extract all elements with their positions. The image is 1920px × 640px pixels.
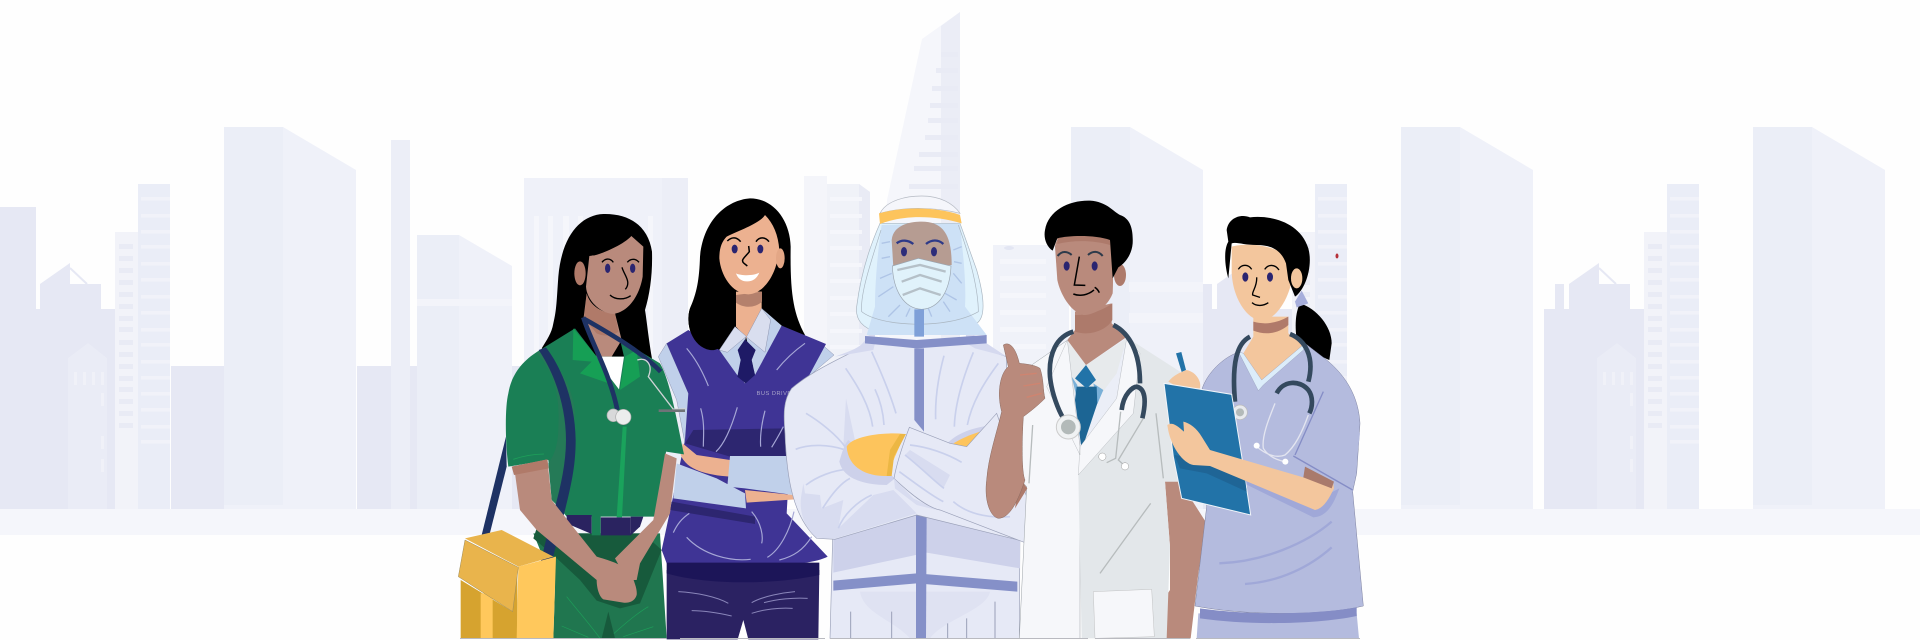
person: bus driver — [658, 198, 834, 639]
suit lower zipper — [916, 513, 927, 638]
doctor tie body — [1075, 387, 1097, 450]
suit upper body — [784, 343, 1027, 542]
nurse arm shadow — [1210, 467, 1339, 517]
bus driver hair back — [688, 198, 807, 367]
paramedic neck — [583, 293, 622, 357]
right tower one — [1401, 127, 1533, 509]
paramedic trouser lines — [562, 597, 653, 638]
hazmat face — [892, 222, 952, 267]
suit legs — [830, 513, 1020, 638]
nurse scrubs top — [1195, 343, 1363, 613]
centre-right city module — [1192, 184, 1347, 509]
doctor shirt — [1067, 338, 1127, 393]
crossed forearm — [894, 413, 1027, 543]
nurse pen — [1176, 352, 1186, 372]
nurse scrub folds — [1219, 522, 1332, 584]
paramedic placket — [617, 427, 627, 517]
nurse ponytail — [1296, 303, 1332, 360]
centre-right tower — [1071, 127, 1203, 509]
clipboard shadow — [1174, 455, 1247, 492]
doctor tie knot — [1075, 365, 1096, 388]
paramedic ear — [574, 261, 586, 285]
yellow headband — [879, 209, 962, 224]
bus driver crossed sleeve — [727, 456, 793, 495]
hood inner — [867, 223, 987, 335]
suit arm underside shade — [801, 483, 917, 539]
paramedic trouser shadow — [533, 528, 662, 608]
paramedic belt — [567, 515, 643, 535]
ground band — [0, 509, 1920, 535]
doctor forehead shade — [1057, 235, 1110, 245]
doctor face — [1055, 229, 1113, 315]
hazmat eyes and brows — [897, 240, 943, 256]
paramedic shirt side panel — [537, 350, 575, 513]
bus driver trousers — [667, 570, 819, 639]
doctor hair — [1045, 201, 1133, 278]
helmet dome — [880, 196, 960, 213]
nurse hair — [1225, 216, 1310, 297]
doctor pocket — [1093, 589, 1154, 638]
second left tower — [417, 235, 512, 509]
far left block — [0, 207, 36, 509]
person: doctor — [986, 201, 1207, 638]
paramedic shirt — [506, 328, 684, 517]
left city module — [15, 184, 170, 509]
bus driver features — [727, 238, 769, 281]
shield zipper section — [914, 309, 924, 337]
nurse ear — [1291, 268, 1302, 288]
bus driver hair front lock — [688, 280, 733, 350]
nurse sleeve fold — [1293, 392, 1353, 490]
nurse neck shadow — [1253, 317, 1288, 333]
nurse collar — [1238, 343, 1305, 391]
nurse scrubs trousers — [1197, 613, 1359, 638]
paramedic trouser seam — [602, 612, 615, 638]
clipboard — [1164, 383, 1251, 515]
forearm wrinkles — [899, 445, 1010, 517]
paramedic neck shadow — [584, 295, 618, 335]
nurse upper fingers — [1168, 370, 1200, 388]
paramedic arm left — [512, 459, 637, 603]
bus driver vest — [662, 326, 828, 568]
wide centre-left building — [524, 178, 688, 509]
paramedic features — [593, 240, 639, 299]
doctor stethoscope — [1050, 325, 1145, 470]
hazmat collar band — [865, 335, 987, 348]
doctor right arm — [1157, 482, 1207, 638]
person: hazmat suit worker — [784, 196, 1027, 638]
face shield outer — [856, 223, 983, 334]
person: nurse — [1164, 216, 1363, 638]
right tower two — [1753, 127, 1885, 509]
centre-right pale building — [993, 245, 1069, 509]
nurse stethoscope — [1233, 334, 1312, 465]
nurse forearm — [1167, 422, 1334, 510]
far glove — [946, 425, 1000, 460]
near glove surround — [839, 440, 895, 485]
paramedic face — [586, 236, 643, 314]
suit left shoulder shadow — [843, 398, 856, 447]
paramedic sleeve line — [513, 454, 544, 459]
far glove fill — [953, 428, 997, 457]
bus driver collar — [719, 308, 771, 352]
paramedic trousers — [533, 533, 667, 638]
surgical mask — [892, 258, 951, 309]
hood folds — [878, 242, 962, 317]
nurse sleeve edge — [1293, 393, 1360, 492]
forearm shadow — [894, 450, 950, 510]
strap tip — [536, 574, 549, 592]
bus driver trouser creases — [678, 592, 808, 616]
doctor neck — [1067, 303, 1126, 365]
doctor lapels — [1047, 338, 1140, 475]
thin tower — [391, 140, 410, 509]
doctor features — [1058, 252, 1103, 295]
bus driver vest hem band — [670, 502, 755, 524]
hood shoulders — [835, 305, 1007, 357]
paramedic arm right — [615, 453, 677, 580]
bottom edge line — [460, 638, 1360, 640]
bus driver lower shirt — [673, 463, 746, 508]
tower highlight bands — [1129, 282, 1203, 323]
nurse features — [1238, 265, 1279, 305]
nurse neck — [1243, 317, 1303, 380]
finger creases — [1020, 373, 1042, 397]
bus driver tie — [737, 339, 756, 383]
bus driver badge text: BUS DRIVER — [757, 391, 796, 397]
spire tower — [870, 12, 960, 509]
paramedic collar — [573, 328, 640, 390]
paramedic hair — [542, 214, 653, 370]
bus driver ear — [776, 248, 785, 268]
doctor ear — [1114, 264, 1126, 286]
bus driver vest lines — [673, 343, 812, 560]
bus driver neck shadow — [736, 292, 762, 307]
nurse hair band — [1295, 291, 1308, 307]
near glove — [847, 433, 905, 476]
person: green paramedic — [458, 214, 686, 638]
doctor coat lines — [1029, 413, 1163, 573]
yellow bag — [458, 530, 556, 638]
paramedic stethoscope — [583, 317, 686, 425]
doctor coat left — [1019, 341, 1080, 638]
low blocks — [171, 366, 524, 509]
centre striped building — [804, 176, 870, 509]
doctor elbow shadow — [1015, 478, 1027, 508]
right city module — [1544, 184, 1699, 509]
red dot on tower — [1336, 254, 1338, 258]
left tower — [224, 127, 356, 509]
paramedic bag strap — [537, 347, 576, 578]
bus driver shirt front — [719, 308, 782, 377]
paramedic left cuff shade — [512, 459, 549, 475]
bus driver arm shadow band — [685, 428, 787, 457]
bus driver neck — [736, 292, 762, 338]
bus driver forearm — [681, 443, 730, 477]
nurse arm elbow shade — [1303, 467, 1334, 488]
nurse hem band — [1200, 607, 1357, 623]
suit waist band — [833, 573, 1017, 592]
bag strap behind — [482, 437, 507, 537]
nurse face — [1232, 245, 1292, 321]
bus driver face — [719, 215, 779, 294]
paramedic undershirt — [597, 357, 624, 389]
doctor coat right — [1078, 337, 1180, 638]
bus driver exposed wrist — [745, 490, 795, 503]
bus driver sleeves — [658, 343, 834, 443]
shield curve — [862, 225, 978, 324]
doctor thumbs up arm — [986, 344, 1045, 518]
suit lower shadow — [860, 592, 990, 638]
upper zipper — [914, 348, 924, 432]
near glove cuff — [887, 434, 906, 476]
doctor shirt blue — [1072, 377, 1103, 404]
suit shadow — [833, 513, 1020, 573]
doctor neck shadow — [1075, 303, 1112, 333]
bus driver trouser belt — [667, 563, 819, 582]
suit wrinkles — [796, 352, 998, 528]
suit leg creases — [851, 602, 995, 638]
